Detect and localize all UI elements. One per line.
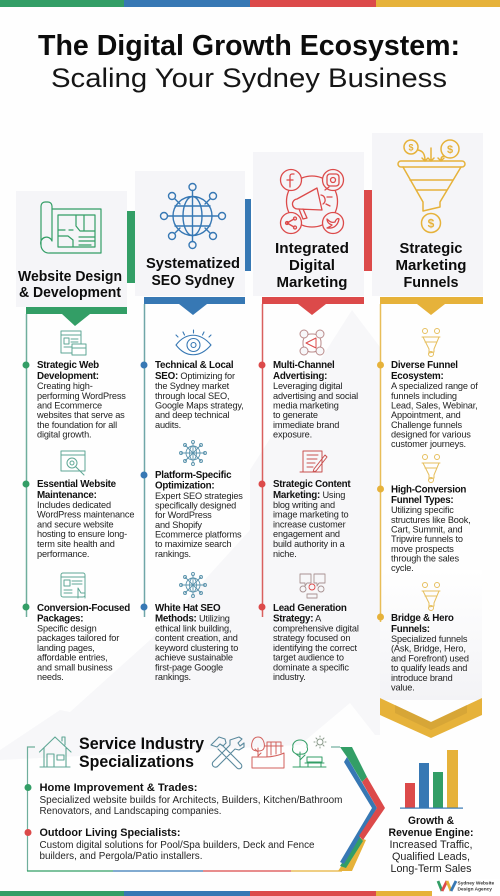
column 2 items: the Sydney market <box>155 381 230 391</box>
frame bottom rule <box>27 870 342 872</box>
column 3 items: image marketing to <box>273 510 348 520</box>
column 2 items: Optimization: <box>155 480 214 492</box>
icon: landscape <box>252 737 284 768</box>
column 2 items: and deep technical <box>155 410 230 420</box>
icon: tools <box>211 737 244 769</box>
panel: strategic funnels: $ <box>428 216 435 230</box>
column 1 items: Packages: <box>37 614 83 624</box>
column 1 items: Essential Website <box>37 479 117 490</box>
heading: specializations: Specializations <box>79 752 194 771</box>
icon: small globe 2 <box>180 572 206 598</box>
title <box>38 30 460 93</box>
column 3 items: engagement and <box>273 529 340 539</box>
column 4 items: cycle. <box>391 563 414 573</box>
panel: systematized seo: SEO Sydney <box>152 273 234 289</box>
icon: eye <box>176 330 211 355</box>
column 2 items: to maximize search <box>155 539 231 549</box>
column 2 items <box>140 330 244 682</box>
column 1 items: landing pages, <box>37 643 95 653</box>
column 1 items: and Ecommerce <box>37 400 102 410</box>
icon: small funnel 2 <box>422 454 440 482</box>
column 4 items: (Ask, Bridge, Hero, <box>391 644 466 654</box>
panel: service industry specializations: builders, and Pergola/Patio installers. <box>40 851 202 862</box>
panel: systematized seo: Systematized <box>146 256 240 272</box>
column 4 items: A specialized range of <box>391 381 478 391</box>
icon: small globe <box>180 440 206 466</box>
column 4 items: Funnels: <box>391 624 430 635</box>
column 4 items: High-Conversion <box>391 484 466 496</box>
column 3 items: target audience to <box>273 652 344 662</box>
column 3 items: increase customer <box>273 520 346 530</box>
column 4 items: Bridge & Hero <box>391 613 454 624</box>
column 2 items: first-page Google <box>155 662 223 672</box>
column 1 items: Specific design <box>37 624 97 634</box>
column 3 items: Marketing: Using <box>273 490 345 501</box>
column 4 items: Tripwire funnels to <box>391 534 463 544</box>
column 4 items: structures like Book, <box>391 515 471 525</box>
panel: website design: & Development <box>19 285 121 301</box>
icon: audience chat <box>300 574 325 598</box>
icon: park bench <box>293 736 326 767</box>
column 1 items: performance. <box>37 549 89 559</box>
icon: small social <box>300 330 324 355</box>
column 1 items: packages tailored for <box>37 633 119 643</box>
icon: document and pen <box>300 451 327 472</box>
icon: landing page <box>61 573 85 598</box>
panel: website design: Website Design <box>18 269 122 285</box>
column 2 items: audits. <box>155 420 181 430</box>
column 4 items: through the sales <box>391 554 459 564</box>
panel: strategic funnels <box>372 133 483 315</box>
column 1 items: Strategic Web <box>37 360 99 371</box>
column 4 items: Funnel Types: <box>391 495 453 506</box>
column 4 items: introduce brand <box>391 673 453 683</box>
column 4 items: designed for various <box>391 430 471 440</box>
column 1 items: affordable entries, <box>37 652 108 662</box>
arrow: chevron stripes <box>338 747 385 871</box>
column 2 items: Platform-Specific <box>155 470 232 481</box>
column 2 items: for WordPress <box>155 510 212 520</box>
heading: specializations: Service Industry <box>79 734 205 753</box>
column 4 items: Specialized funnels <box>391 634 468 644</box>
column 1 items: digital growth. <box>37 430 91 440</box>
column 3 items: Strategy: A <box>273 614 322 624</box>
title: Scaling Your Sydney Business <box>51 63 447 93</box>
column 3 items: advertising and social <box>273 391 358 401</box>
column 3 items <box>258 330 359 682</box>
column 1 items: websites that serve as <box>36 410 125 420</box>
panel: service industry specializations: Custom digital solutions for Pool/Spa builders, Deck and Fence <box>40 840 315 851</box>
column 3 items: to generate <box>273 410 318 420</box>
panel: website design <box>16 191 135 326</box>
column 2 items: SEO: Optimizing for <box>155 371 235 382</box>
column 3 items: blog writing and <box>273 500 335 510</box>
column 2 items: Technical & Local <box>155 360 234 371</box>
growth and revenue block <box>388 750 474 875</box>
column 2 items: ethical link building, <box>155 624 231 634</box>
icon: web development <box>61 331 86 355</box>
bottom colour bar <box>0 891 500 896</box>
logo: sydney website design agency: Sydney Website <box>458 880 495 886</box>
column 4 items: Utilizing specific <box>391 505 454 515</box>
column 2 items: keyword clustering to <box>155 643 238 653</box>
column 3 items: Lead Generation <box>273 603 347 614</box>
logo: sydney website design agency <box>432 879 500 896</box>
column 1 items: Conversion-Focused <box>37 603 130 614</box>
column 4 items: funnels including <box>391 391 457 401</box>
column 3 items: Strategic Content <box>273 479 351 490</box>
panel: service industry specializations: Renovators, and Landscaping companies. <box>40 806 222 817</box>
column 1 items: Maintenance: <box>37 490 97 501</box>
column 3 items: build authority in a <box>273 539 346 549</box>
column 2 items: and Shopify <box>155 520 202 530</box>
column 4 items: Appointment, and <box>391 410 461 420</box>
column 1 items <box>22 331 134 682</box>
column 3 items: Leveraging digital <box>273 381 342 391</box>
column 1 items: the foundation for all <box>37 420 117 430</box>
column 1 items: term site health and <box>37 539 115 549</box>
column 4 items: customer journeys. <box>391 439 466 449</box>
bar chart <box>400 750 463 809</box>
icon: small funnel 3 <box>422 582 440 610</box>
column 4 items: Ecosystem: <box>391 371 444 382</box>
growth and revenue block: Increased Traffic, <box>390 839 472 851</box>
growth and revenue block: Long-Term Sales <box>390 863 472 875</box>
column 3 items: strategy focused on <box>273 633 350 643</box>
column 1 items: WordPress maintenance <box>37 510 134 520</box>
column 1 items: performing WordPress <box>37 391 126 401</box>
top colour bar <box>0 0 500 7</box>
timeline rails <box>26 304 380 622</box>
column 4 items: to qualify leads and <box>391 663 467 673</box>
column 3 items: identifying the correct <box>273 643 357 653</box>
column 2 items: White Hat SEO <box>155 603 221 614</box>
column 1 items: Development: <box>37 371 99 382</box>
icon: house <box>40 737 71 767</box>
column 2 items: specifically designed <box>155 500 236 510</box>
column 1 items: and small business <box>37 662 113 672</box>
column 2 items: rankings. <box>155 672 191 682</box>
column 3 items: media marketing <box>273 400 339 410</box>
panel: strategic funnels: Funnels <box>404 275 458 291</box>
column 3 items: industry. <box>273 672 306 682</box>
panel: service industry specializations: Home Improvement & Trades: <box>40 782 198 794</box>
column 1 items: hosting to ensure long- <box>37 529 127 539</box>
yellow chevron <box>380 698 482 738</box>
column 4 items: Cart, Summit, and <box>391 524 463 534</box>
heading: specializations <box>79 734 205 771</box>
icon: maintenance gear <box>61 451 85 475</box>
logo: sydney website design agency: Design Agency <box>458 886 492 892</box>
column 1 items: needs. <box>37 672 64 682</box>
panel: strategic funnels: $ <box>408 142 414 152</box>
panel: service industry specializations <box>24 734 385 871</box>
icon: globe network <box>160 184 226 248</box>
title: The Digital Growth Ecosystem: <box>38 30 460 62</box>
panel: service industry specializations: Specialized website builds for Architects, Builders, Kitchen/Bathroom <box>40 795 342 806</box>
panel: strategic funnels: Strategic <box>400 241 462 257</box>
column 2 items: Ecommerce platforms <box>155 530 242 540</box>
column 2 items: rankings. <box>155 549 191 559</box>
column 3 items: comprehensive digital <box>273 624 359 634</box>
column 4 items: Diverse Funnel <box>391 360 458 371</box>
panel: integrated digital marketing: Integrated <box>275 241 349 257</box>
column 3 items: immediate brand <box>273 420 339 430</box>
column 1 items: Includes dedicated <box>37 500 111 510</box>
panel: integrated digital marketing: Digital <box>289 258 335 274</box>
icon: funnel with coins <box>398 140 465 232</box>
growth and revenue block: Revenue Engine: <box>388 827 474 839</box>
column 4 items: and Forefront) used <box>391 654 469 664</box>
column 3 items: Multi-Channel <box>273 360 335 371</box>
background mountains <box>0 310 482 760</box>
growth and revenue block: Qualified Leads, <box>392 851 470 863</box>
panel: integrated digital marketing: Marketing <box>276 275 348 291</box>
panel: systematized seo <box>135 171 251 315</box>
column 2 items: Methods: Utilizing <box>155 614 230 624</box>
column 2 items: Google Maps strategy, <box>155 400 244 410</box>
column 3 items: Advertising: <box>273 371 327 382</box>
column 3 items: exposure. <box>273 430 312 440</box>
column 4 items: Lead, Sales, Webinar, <box>391 400 478 410</box>
panel: service industry specializations: Outdoor Living Specialists: <box>40 827 180 839</box>
panel: integrated digital marketing <box>253 152 372 315</box>
column 3 items: niche. <box>273 549 297 559</box>
column 2 items: achieve sustainable <box>155 652 233 662</box>
icon: small funnel 1 <box>422 328 440 356</box>
growth and revenue block: Growth & <box>408 815 454 827</box>
column 4 items: Challenge funnels <box>391 420 463 430</box>
column 1 items: Creating high- <box>37 381 93 391</box>
column 1 items: and secure website <box>37 520 114 530</box>
column 2 items: content creation, and <box>155 633 238 643</box>
column 2 items: Expert SEO strategies <box>155 491 243 501</box>
panel: strategic funnels: $ <box>447 144 453 156</box>
column 2 items: through local SEO, <box>155 391 229 401</box>
panel: strategic funnels: Marketing <box>396 258 466 274</box>
column 4 items: move prospects <box>391 544 454 554</box>
column 3 items: dominate a specific <box>273 662 349 672</box>
icon: social megaphone <box>280 170 344 234</box>
column 4 items <box>377 328 482 738</box>
icon: blueprint <box>41 202 101 253</box>
column 4 items: value. <box>391 682 415 692</box>
